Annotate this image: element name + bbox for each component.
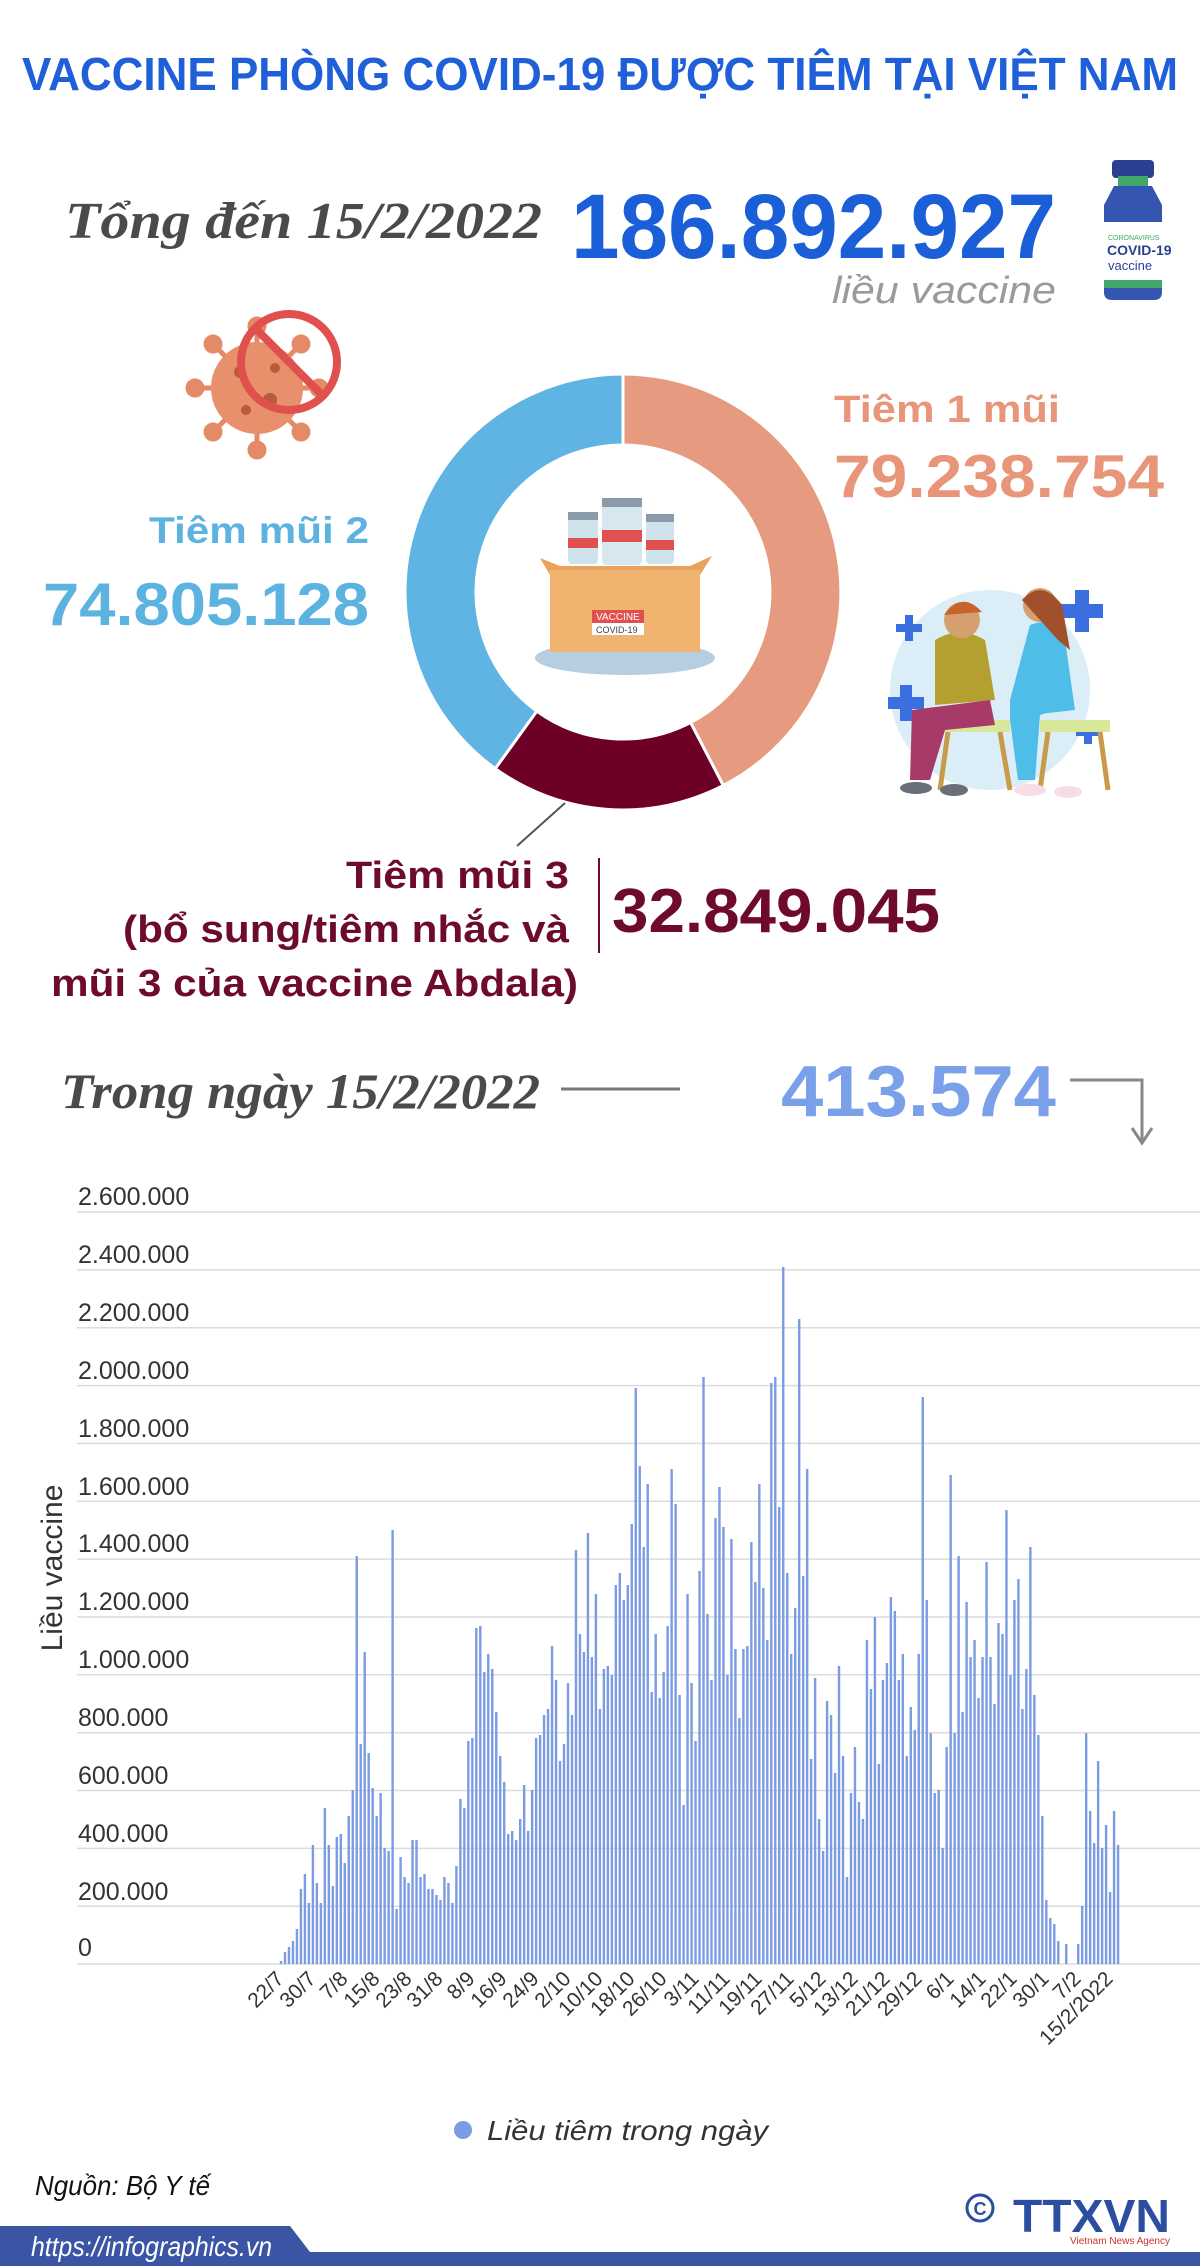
x axis labels: 19/11	[714, 1967, 767, 2020]
segment: tiem mui 2	[405, 374, 623, 769]
total label: Tổng đến 15/2/2022	[65, 193, 542, 250]
arrow	[1070, 1080, 1152, 1143]
y axis labels: 600.000	[78, 1762, 168, 1790]
label: tiem mui 2: Tiêm mũi 2	[149, 510, 369, 551]
bars	[281, 1267, 1118, 1964]
x axis labels	[243, 1967, 1118, 2050]
x axis labels: 16/9	[466, 1967, 512, 2012]
x axis labels: 30/7	[275, 1967, 321, 2012]
x axis labels: 8/9	[443, 1967, 480, 2004]
icon: vaccine vial: CORONAVIRUS	[1108, 235, 1160, 242]
logo: TTXVN: Vietnam News Agency	[1070, 2236, 1170, 2247]
illustration: vaccination scene	[888, 588, 1110, 798]
label: tiem mui 2	[43, 510, 369, 638]
y axis labels	[78, 1183, 189, 1962]
x axis labels: 31/8	[402, 1967, 448, 2012]
label: tiem 1 mui: 79.238.754	[834, 443, 1165, 510]
label: tiem mui 2: 74.805.128	[43, 571, 369, 638]
logo: TTXVN	[967, 2190, 1170, 2247]
x axis labels: 7/8	[316, 1967, 353, 2004]
total number: liều vaccine	[832, 270, 1056, 312]
icon: vaccine box: COVID-19	[596, 625, 638, 635]
x axis labels: 5/12	[785, 1967, 831, 2012]
x axis labels: 14/1	[945, 1967, 991, 2012]
title: VACCINE PHÒNG COVID-19 ĐƯỢC TIÊM TẠI VIỆT NAM	[22, 48, 1178, 100]
daily number: 413.574	[781, 1052, 1056, 1132]
bar chart	[36, 1183, 1200, 2050]
x axis labels: 15/8	[339, 1967, 385, 2012]
icon: virus prohibited	[188, 314, 337, 457]
label: tiem 1 mui: Tiêm 1 mũi	[834, 389, 1060, 431]
x axis labels: 11/11	[683, 1967, 735, 2018]
x axis labels: 26/10	[618, 1967, 672, 2021]
label: tiem mui 3: Tiêm mũi 3	[346, 855, 569, 897]
y axis labels: 800.000	[78, 1704, 168, 1732]
y axis labels: 0	[78, 1934, 92, 1962]
logo: TTXVN: TTXVN	[1013, 2190, 1170, 2242]
icon: vaccine box	[535, 498, 715, 675]
y axis labels: 1.000.000	[78, 1646, 189, 1674]
y axis labels: 2.200.000	[78, 1299, 189, 1327]
logo: TTXVN: C	[974, 2199, 986, 2219]
icon: vaccine box: VACCINE	[596, 612, 640, 623]
icon: vaccine vial	[1104, 160, 1172, 300]
leader line	[517, 803, 565, 846]
y axis labels: 200.000	[78, 1878, 168, 1906]
footer band	[0, 2226, 1200, 2266]
icon: vaccine vial: COVID-19	[1107, 242, 1172, 258]
y axis labels: 400.000	[78, 1820, 168, 1848]
y axis labels: 2.400.000	[78, 1241, 189, 1269]
y axis labels: 1.200.000	[78, 1588, 189, 1616]
label: tiem mui 3: (bổ sung/tiêm nhắc và	[123, 907, 570, 951]
label: tiem mui 3: mũi 3 của vaccine Abdala)	[51, 963, 578, 1005]
x axis labels: 6/1	[922, 1967, 959, 2004]
y axis title: Liều vaccine	[36, 1485, 69, 1651]
x axis labels: 22/7	[243, 1967, 289, 2012]
label: tiem mui 3	[51, 855, 578, 1005]
x axis labels: 2/10	[530, 1967, 576, 2012]
x axis labels: 18/10	[586, 1967, 640, 2021]
x axis labels: 15/2/2022	[1035, 1967, 1118, 2050]
icon: vaccine vial: vaccine	[1108, 258, 1152, 273]
y axis labels: 1.600.000	[78, 1473, 189, 1501]
x axis labels: 22/1	[976, 1967, 1022, 2012]
number: tiem mui 3: 32.849.045	[612, 877, 940, 946]
donut chart	[405, 374, 841, 810]
x axis labels: 27/11	[746, 1967, 799, 2020]
x axis labels: 13/12	[809, 1967, 863, 2021]
x axis labels: 3/11	[659, 1967, 704, 2011]
y axis labels: 2.600.000	[78, 1183, 189, 1211]
y axis labels: 1.800.000	[78, 1415, 189, 1443]
x axis labels: 10/10	[554, 1967, 608, 2021]
segment: tiem mui 3	[495, 711, 723, 810]
label: tiem 1 mui	[834, 389, 1165, 510]
legend: Liều tiêm trong ngày	[487, 2115, 770, 2146]
footer band: https://infographics.vn	[31, 2231, 272, 2262]
x axis labels: 24/9	[498, 1967, 544, 2012]
x axis labels: 29/12	[873, 1967, 927, 2021]
segment: tiem 1 mui	[623, 374, 841, 786]
daily label: Trong ngày 15/2/2022	[61, 1063, 540, 1119]
source: Nguồn: Bộ Y tế	[35, 2170, 212, 2201]
x axis labels: 21/12	[841, 1967, 895, 2021]
x axis labels: 7/2	[1049, 1967, 1086, 2004]
x axis labels: 23/8	[371, 1967, 417, 2012]
total number: 186.892.927	[571, 176, 1056, 278]
x axis labels: 30/1	[1008, 1967, 1054, 2012]
y axis labels: 1.400.000	[78, 1530, 189, 1558]
y axis labels: 2.000.000	[78, 1357, 189, 1385]
